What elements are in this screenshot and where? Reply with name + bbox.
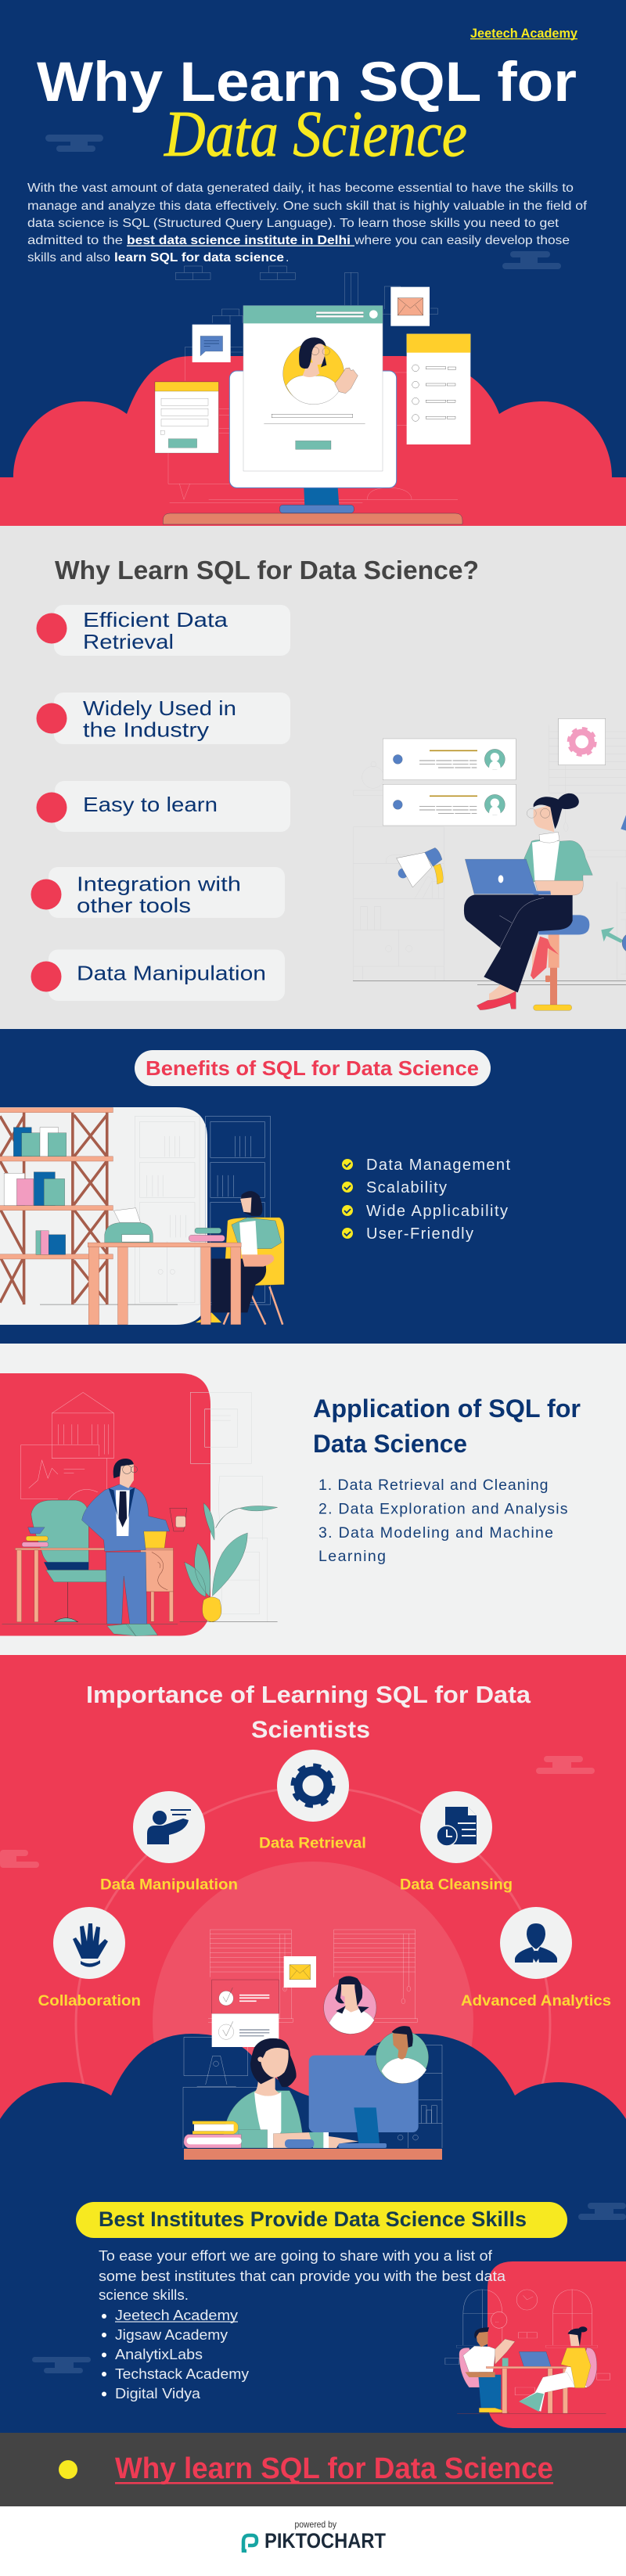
intro paragraph: skills and also bbox=[27, 251, 110, 264]
institutes list: Digital Vidya bbox=[115, 2386, 201, 2402]
navy cloud and lower section bbox=[0, 2034, 626, 2433]
footer: powered by Piktochart: PIKTOCHART bbox=[264, 2529, 386, 2553]
woman bbox=[519, 2326, 591, 2412]
red panel bbox=[0, 1373, 210, 1635]
red panel bbox=[487, 2261, 626, 2428]
gear card bbox=[559, 718, 606, 765]
desk bbox=[184, 2149, 442, 2160]
intro paragraph bbox=[27, 182, 588, 264]
link: Jeetech Academy: Jeetech Academy bbox=[470, 26, 578, 41]
paragraph: science skills. bbox=[99, 2287, 189, 2303]
stacked books bbox=[22, 1527, 49, 1547]
intro paragraph: data science is SQL (Structured Query Language). To learn those skills you need to get bbox=[27, 217, 559, 230]
megaphone bbox=[397, 847, 443, 887]
monitor bbox=[309, 2056, 419, 2148]
window blinds bbox=[208, 1930, 417, 2022]
speech bubble bbox=[491, 2312, 507, 2328]
paragraph bbox=[99, 2248, 506, 2303]
list card bbox=[407, 334, 470, 444]
avatar bbox=[283, 337, 358, 405]
node: Collaboration bbox=[38, 1907, 141, 2009]
item: Data Manipulation bbox=[31, 950, 285, 1001]
heading: Why Learn SQL for Data Science? bbox=[55, 556, 479, 585]
panel: best institutes bbox=[32, 2202, 626, 2428]
plant bbox=[185, 1503, 278, 1622]
stool bbox=[534, 915, 589, 1010]
node: Data Cleansing: Data Cleansing bbox=[400, 1876, 513, 1894]
item: Efficient Data Retrieval bbox=[36, 605, 290, 656]
table and laptop bbox=[486, 2351, 570, 2413]
item: Easy to learn: Easy to learn bbox=[83, 793, 218, 816]
chair bbox=[31, 1500, 108, 1622]
mail card bbox=[390, 287, 430, 326]
books bbox=[4, 1128, 67, 1254]
woman at desk bbox=[223, 2038, 358, 2148]
heading pill: Benefits of SQL for Data Science bbox=[146, 1056, 479, 1080]
heading pill: Best Institutes Provide Data Science Skills bbox=[99, 2207, 527, 2231]
band: link: Why learn SQL for Data Science bbox=[115, 2452, 553, 2485]
speech bubble: ... bbox=[495, 2319, 498, 2322]
intro paragraph: . bbox=[286, 251, 289, 264]
intro paragraph: where you can easily develop those bbox=[354, 234, 570, 247]
intro paragraph: learn SQL for data science bbox=[114, 251, 284, 264]
title: Why Learn SQL for bbox=[37, 52, 577, 113]
decorative clouds bbox=[0, 1756, 595, 1868]
icon: Piktochart logo bbox=[243, 2535, 257, 2553]
notification cards bbox=[383, 739, 516, 826]
red cloud bbox=[0, 356, 626, 526]
node: Advanced Analytics: Advanced Analytics bbox=[461, 1993, 611, 2009]
node: Data Manipulation: Data Manipulation bbox=[100, 1876, 238, 1894]
illustration: man with coffee bbox=[2, 1392, 278, 1636]
institutes list: Jigsaw Academy bbox=[115, 2327, 228, 2343]
node: Data Manipulation bbox=[100, 1791, 238, 1894]
books bbox=[184, 2121, 242, 2148]
checklist: Wide Applicability bbox=[366, 1203, 508, 1220]
man bbox=[463, 2327, 515, 2412]
institutes list bbox=[102, 2308, 249, 2402]
node: Collaboration: Collaboration bbox=[38, 1993, 141, 2009]
task cards bbox=[212, 1980, 279, 2047]
rings bbox=[76, 1787, 550, 2261]
table bbox=[15, 1548, 173, 1622]
numbered list: 3. Data Modeling and Machine bbox=[318, 1524, 553, 1542]
background shelves bbox=[183, 2037, 442, 2148]
checklist: User-Friendly bbox=[366, 1225, 473, 1243]
numbered list bbox=[318, 1477, 568, 1565]
checklist: Data Management bbox=[366, 1157, 510, 1174]
checklist: Scalability bbox=[366, 1179, 447, 1196]
woman bbox=[464, 793, 592, 1010]
chat card bbox=[192, 325, 231, 362]
band: link bbox=[0, 2433, 626, 2506]
item: Widely Used in the Industry bbox=[36, 693, 290, 744]
footer: powered by Piktochart bbox=[0, 2506, 626, 2576]
mail card bbox=[284, 1956, 316, 1988]
panel: benefits bbox=[0, 1029, 626, 1344]
woman bbox=[196, 1191, 282, 1322]
caller: man bbox=[376, 2026, 429, 2084]
panel: why learn SQL bbox=[0, 526, 626, 1029]
institutes list: Techstack Academy bbox=[115, 2366, 249, 2382]
title bbox=[37, 52, 577, 171]
illustration: woman with laptop bbox=[353, 718, 626, 1010]
white panel bbox=[0, 1107, 207, 1325]
institutes list: Jeetech Academy bbox=[115, 2308, 238, 2323]
chair bbox=[224, 1218, 284, 1286]
item: Integration with other tools: other tools bbox=[77, 894, 191, 917]
panel: hero bbox=[0, 0, 626, 526]
decorative clouds bbox=[32, 2203, 626, 2373]
panel: importance bbox=[0, 1655, 626, 2261]
numbered list: Learning bbox=[318, 1548, 386, 1565]
item: Integration with other tools: Integration with bbox=[77, 872, 241, 895]
footer: powered by Piktochart: powered by bbox=[294, 2519, 336, 2530]
node: Data Cleansing bbox=[400, 1791, 513, 1894]
heading: Scientists bbox=[251, 1715, 370, 1743]
numbered list: 1. Data Retrieval and Cleaning bbox=[318, 1477, 548, 1494]
printer bbox=[105, 1208, 153, 1243]
node: Data Retrieval: Data Retrieval bbox=[259, 1836, 366, 1851]
item: Widely Used in the Industry: the Industry bbox=[83, 718, 209, 742]
man bbox=[82, 1459, 187, 1636]
intro paragraph: manage and analyze this data effectively. One such skill that is highly valuable in the field of bbox=[27, 200, 588, 213]
node: Advanced Analytics bbox=[461, 1907, 611, 2009]
caller: woman bbox=[324, 1976, 376, 2034]
desk books bbox=[189, 1228, 225, 1242]
heading: Importance of Learning SQL for Data bbox=[86, 1681, 531, 1708]
illustration: two people at table bbox=[445, 2290, 610, 2413]
heading bbox=[86, 1681, 531, 1743]
panel: application bbox=[0, 1344, 626, 1655]
illustration: computer with login screen bbox=[155, 266, 470, 524]
item: Data Manipulation: Data Manipulation bbox=[77, 961, 266, 984]
illustration: video call at desk bbox=[183, 1930, 442, 2160]
checklist bbox=[342, 1157, 510, 1243]
intro paragraph: admitted to the bbox=[27, 234, 123, 247]
heading bbox=[313, 1394, 581, 1458]
decorative clouds bbox=[45, 135, 561, 269]
item: Integration with other tools bbox=[31, 867, 285, 918]
illustration: woman at desk with shelves bbox=[0, 1108, 284, 1325]
numbered list: 2. Data Exploration and Analysis bbox=[318, 1501, 568, 1518]
institutes list: AnalytixLabs bbox=[115, 2347, 203, 2362]
title: Data Science bbox=[164, 98, 467, 171]
form card bbox=[155, 382, 218, 453]
intro paragraph: With the vast amount of data generated daily, it has become essential to have the skills to bbox=[27, 182, 574, 195]
heading pill bbox=[76, 2202, 567, 2238]
heading: Data Science bbox=[313, 1430, 467, 1458]
item: Easy to learn bbox=[36, 781, 290, 832]
paragraph: To ease your effort we are going to share with you a list of bbox=[99, 2248, 493, 2264]
intro paragraph: best data science institute in Delhi bbox=[127, 234, 351, 247]
laptop bbox=[141, 1529, 167, 1548]
heading: Application of SQL for bbox=[313, 1394, 581, 1423]
paragraph: some best institutes that can provide you with the best data bbox=[99, 2268, 506, 2284]
item: Efficient Data Retrieval: Efficient Data bbox=[83, 608, 228, 631]
desk bbox=[88, 1243, 241, 1325]
item: Efficient Data Retrieval: Retrieval bbox=[83, 630, 174, 653]
node: Data Retrieval bbox=[259, 1750, 366, 1851]
arrow bbox=[601, 815, 626, 953]
heading pill bbox=[135, 1050, 491, 1086]
item: Widely Used in the Industry: Widely Used in bbox=[83, 696, 236, 720]
